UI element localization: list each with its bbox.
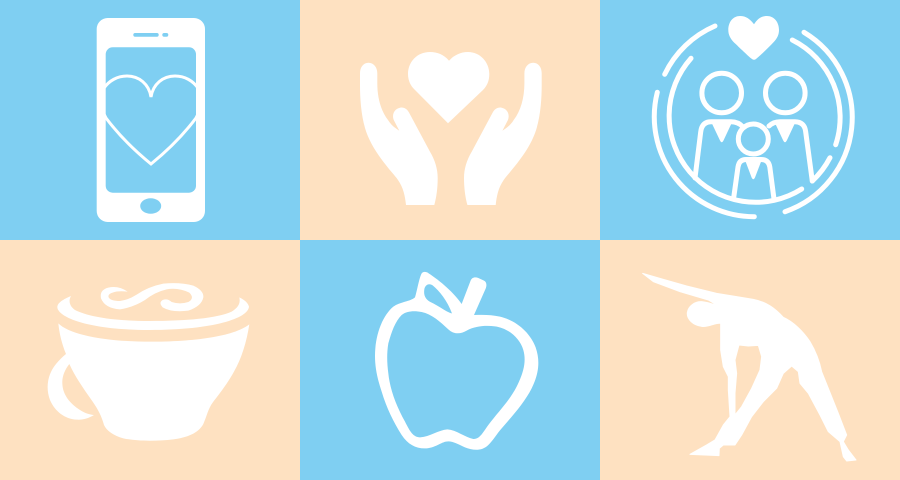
panel: yoga stretch: [600, 240, 900, 480]
icon: smartphone with heart: [97, 18, 205, 222]
icon: family with heart: [654, 16, 852, 217]
icon: coffee cup with swirl: [48, 283, 249, 441]
icon: apple outline: [375, 272, 538, 450]
panel: apple: [300, 240, 600, 480]
icon: hands with heart: [360, 52, 542, 205]
panel: coffee cup: [0, 240, 300, 480]
icon: person stretching: [643, 273, 856, 461]
panel: hands holding heart: [300, 0, 600, 240]
panel: family in circle: [600, 0, 900, 240]
panel: phone with heart: [0, 0, 300, 240]
